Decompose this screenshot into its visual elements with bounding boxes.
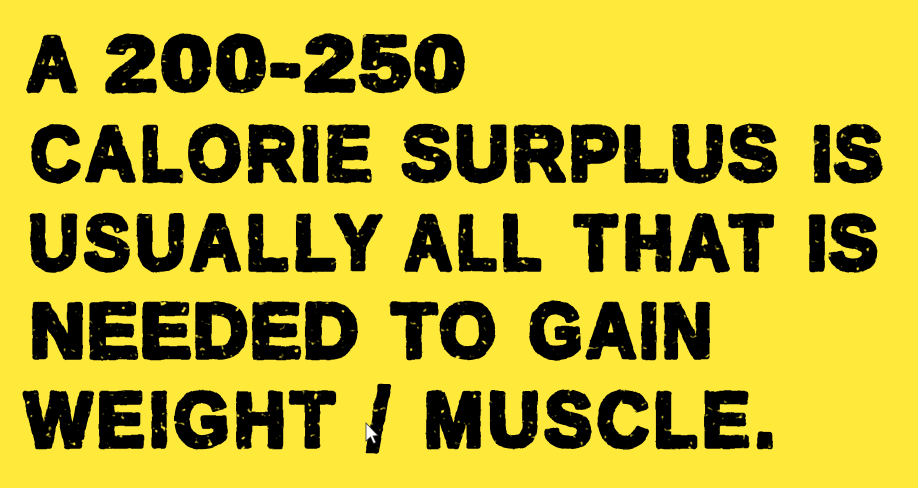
line 4: NEEDED TO GAIN: TO	[392, 288, 496, 373]
line 2: CALORIE SURPLUS IS: CALORIE	[31, 113, 371, 197]
line 2: CALORIE SURPLUS IS	[31, 111, 882, 197]
icon: mouse cursor	[366, 423, 378, 444]
line 1: A 200-250: A	[27, 22, 77, 107]
line 3: USUALLY ALL THAT IS: THAT	[575, 202, 772, 286]
line 3: USUALLY ALL THAT IS: USUALLY	[29, 202, 381, 286]
line 2: CALORIE SURPLUS IS: IS	[812, 111, 882, 196]
line 3: USUALLY ALL THAT IS	[29, 200, 877, 286]
line 5: WEIGHT / MUSCLE.: WEIGHT	[25, 378, 334, 463]
line 4: NEEDED TO GAIN: GAIN	[529, 290, 712, 374]
line 4: NEEDED TO GAIN: NEEDED	[30, 289, 358, 374]
line 5: WEIGHT / MUSCLE.: MUSCLE.	[424, 378, 775, 463]
line 2: CALORIE SURPLUS IS: SURPLUS	[402, 111, 777, 196]
line 4: NEEDED TO GAIN	[30, 288, 712, 374]
line 3: USUALLY ALL THAT IS: ALL	[405, 200, 541, 285]
line 1: A 200-250: 200-250	[106, 21, 465, 106]
line 3: USUALLY ALL THAT IS: IS	[807, 200, 877, 285]
line 5: WEIGHT / MUSCLE.	[25, 370, 775, 469]
line 5: WEIGHT / MUSCLE.: /	[366, 370, 390, 469]
